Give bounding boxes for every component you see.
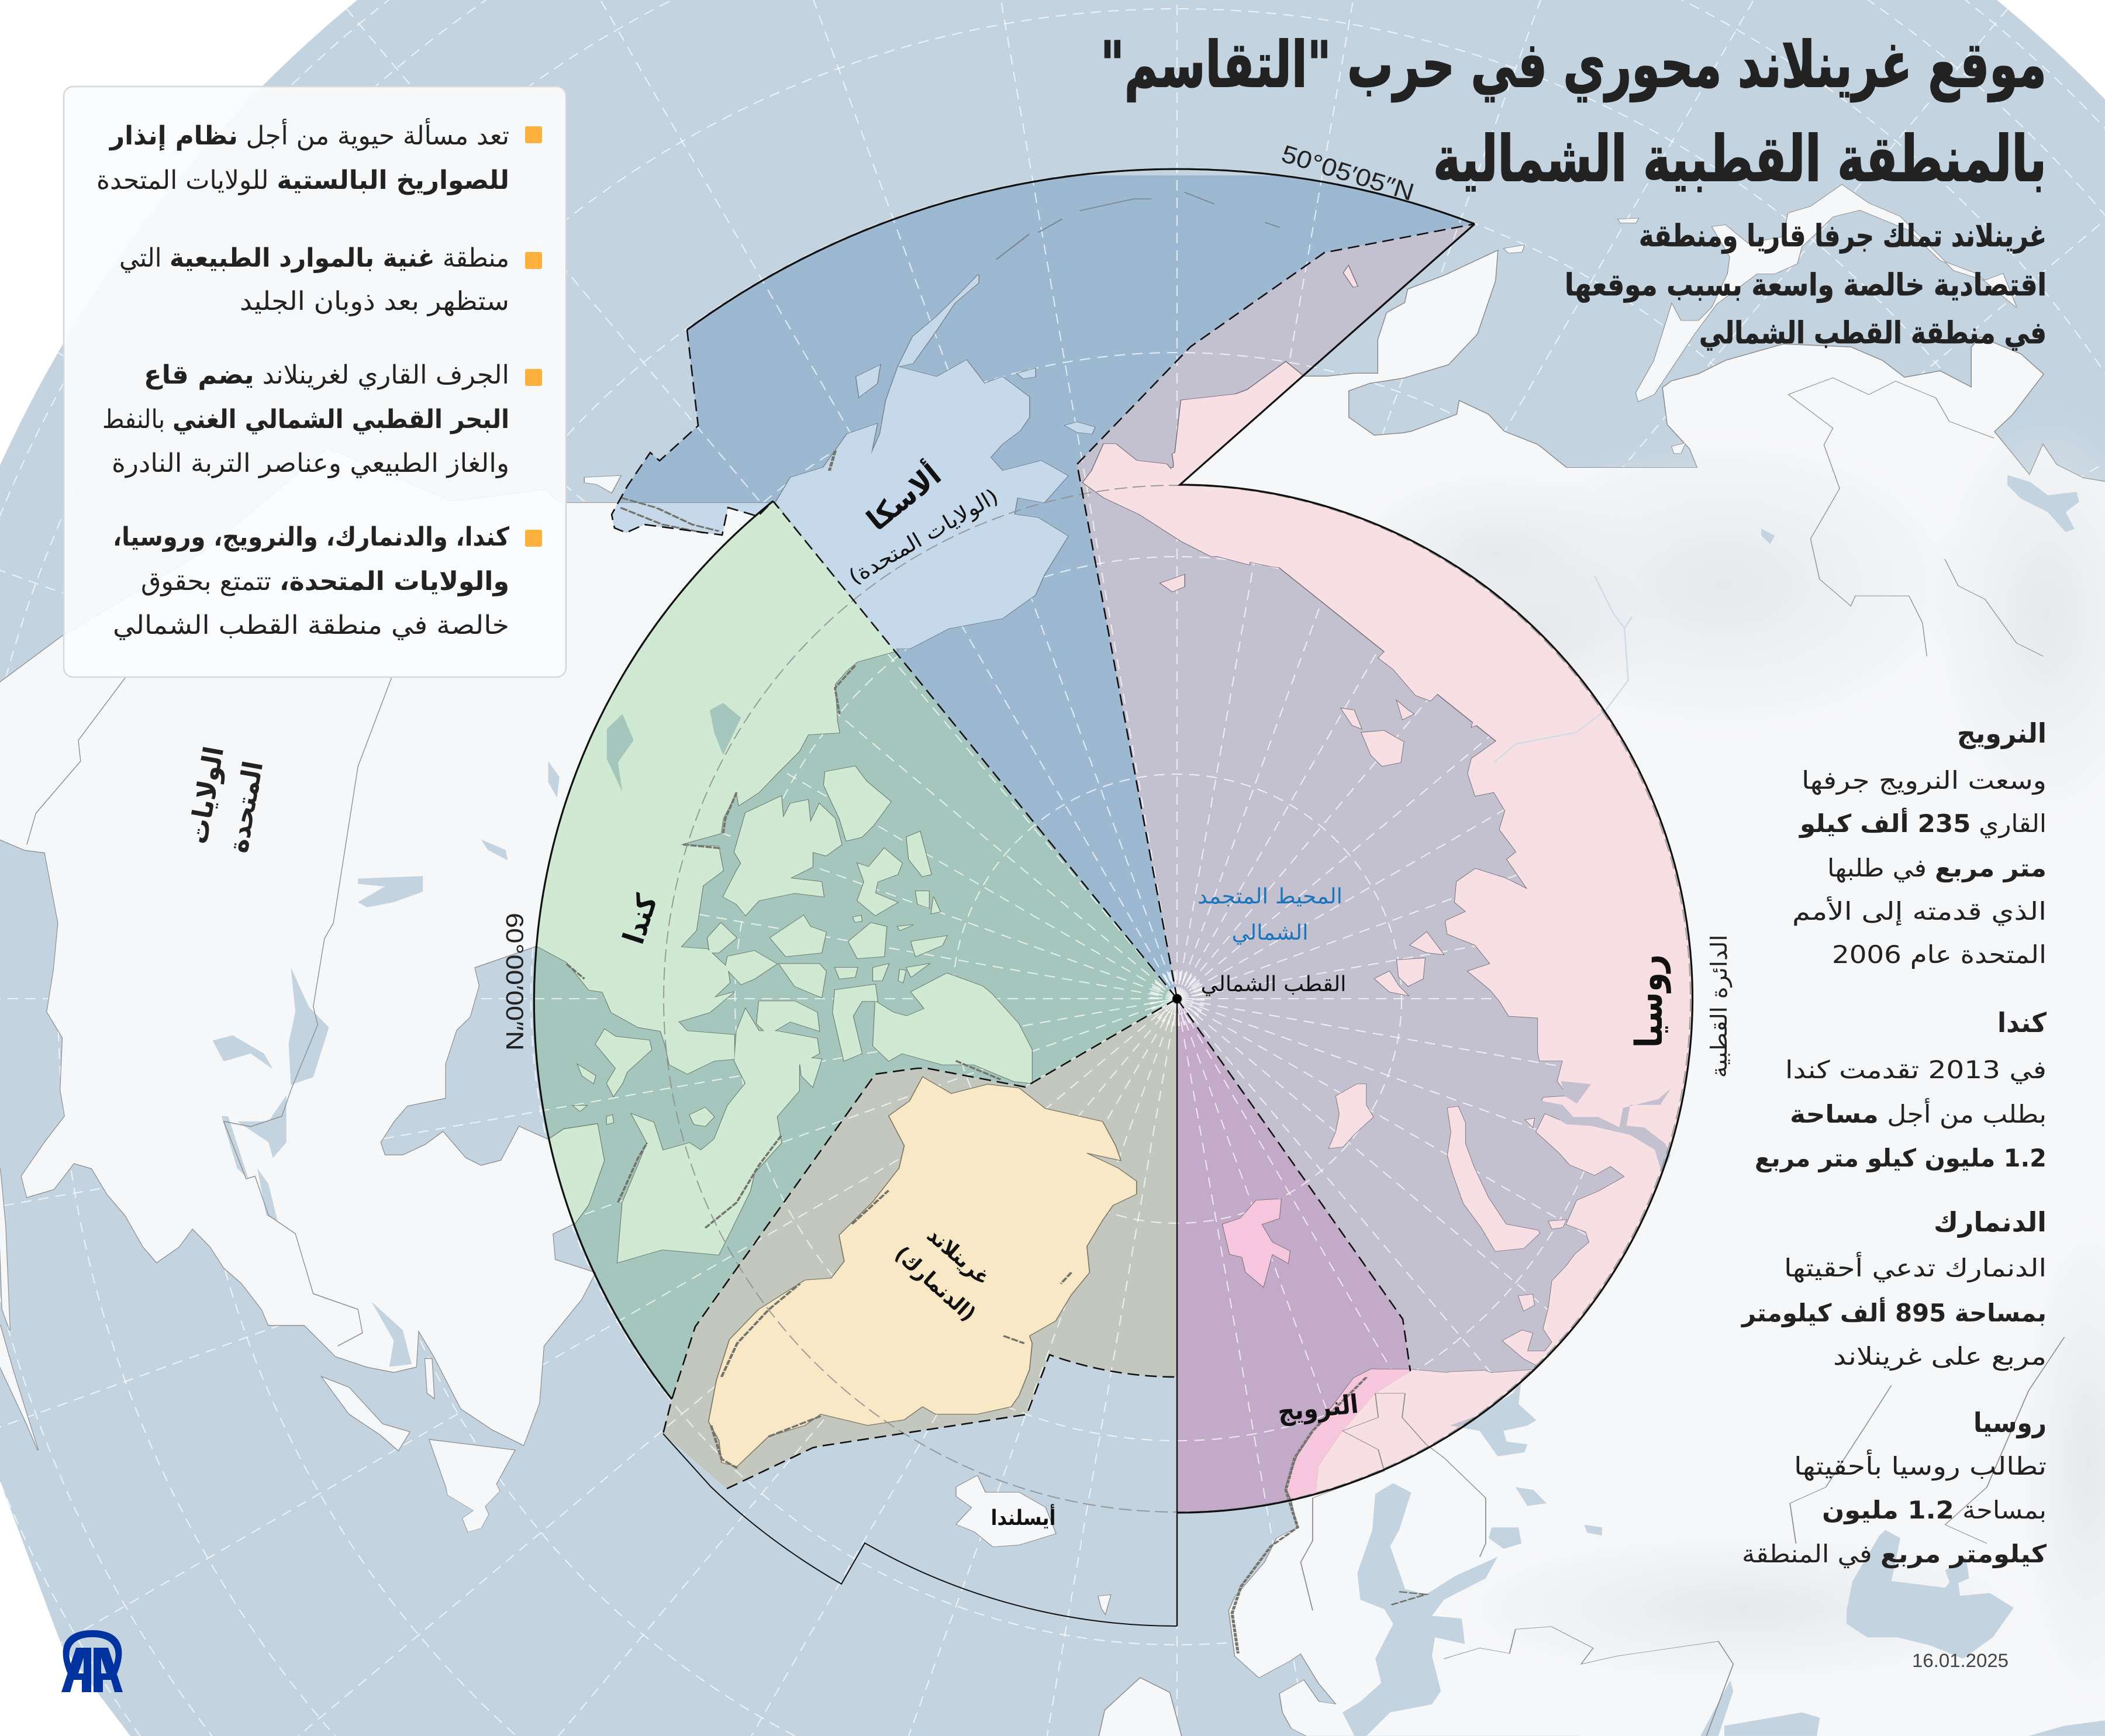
label: north pole: القطب الشمالي: [1201, 972, 1346, 996]
point 3: الجرف القاري لغرينلاند يضم قاع: [144, 360, 509, 390]
text: russia claim: بمساحة 1.2 مليون: [1822, 1496, 2047, 1525]
text: canada claim: في 2013 تقدمت كندا: [1785, 1055, 2047, 1085]
text: russia claim: [1742, 1407, 2047, 1569]
white strip beyond globe edge: [0, 1481, 130, 1736]
label: russia: روسيا: [1628, 954, 1671, 1048]
terrain shading: [1345, 403, 2105, 1707]
label: alaska united states: (الولايات المتحدة): [845, 485, 1003, 589]
date: 16.01.2025: [1912, 1650, 2009, 1671]
greenland: [709, 1076, 1137, 1466]
text: denmark claim: بمساحة 895 ألف كيلومتر: [1741, 1297, 2047, 1328]
point 2: ستظهر بعد ذوبان الجليد: [240, 287, 509, 316]
point 2: [119, 243, 542, 316]
zone boundary lines: [534, 169, 1693, 1626]
label: arctic ocean: [1198, 885, 1343, 945]
text: denmark claim: الدنمارك: [1934, 1206, 2047, 1238]
text: norway claim: المتحدة عام 2006: [1832, 940, 2047, 969]
dark fjord coastlines: [567, 451, 1426, 1654]
label: arctic ocean: الشمالي: [1231, 921, 1309, 945]
label: greenland: غرينلاند: [922, 1223, 995, 1290]
label: 60 degrees latitude: 60°00′00″N: [501, 913, 529, 1051]
label: canada: كندا: [616, 890, 664, 948]
text: denmark claim: الدنمارك تدعي أحقيتها: [1784, 1252, 2047, 1283]
label: united states: [182, 744, 269, 855]
arctic circle dashed line: [664, 485, 1690, 1512]
label: 50 degrees latitude: 50°05′05″N: [1278, 140, 1417, 206]
point 1: تعد مسألة حيوية من أجل نظام إنذار: [109, 118, 509, 151]
label: norway: النرويج: [1276, 1389, 1359, 1427]
north pole marker: [1172, 994, 1182, 1003]
text: norway claim: وسعت النرويج جرفها: [1802, 766, 2047, 795]
label: united states: المتحدة: [222, 759, 269, 855]
text: norway claim: [1792, 717, 2047, 969]
text: russia claim: روسيا: [1973, 1407, 2047, 1438]
text: russia claim: كيلومتر مربع في المنطقة: [1742, 1540, 2047, 1569]
point 3: والغاز الطبيعي وعناصر التربة النادرة: [112, 448, 509, 478]
text: norway claim: الذي قدمته إلى الأمم: [1792, 896, 2047, 926]
point 4: [113, 522, 542, 640]
point 4: كندا، والدنمارك، والنرويج، وروسيا،: [113, 522, 509, 552]
panel: key points: [64, 87, 566, 677]
text: denmark claim: [1741, 1206, 2047, 1371]
subtitle: [1565, 219, 2047, 351]
aleutian island chain: [996, 192, 1280, 260]
subtitle: في منطقة القطب الشمالي: [1699, 316, 2047, 351]
text: russia claim: تطالب روسيا بأحقيتها: [1794, 1449, 2047, 1481]
point 1: للصواريخ البالستية للولايات المتحدة: [96, 165, 509, 195]
text: canada claim: بطلب من أجل مساحة: [1790, 1098, 2047, 1128]
text: norway claim: النرويج: [1957, 717, 2047, 749]
subtitle: اقتصادية خالصة واسعة بسبب موقعها: [1565, 268, 2047, 303]
point 2: منطقة غنية بالموارد الطبيعية التي: [119, 243, 509, 273]
label: arctic circle: الدائرة القطبية: [1706, 934, 1733, 1078]
point 3: [102, 360, 542, 478]
borders and rivers: [27, 378, 2065, 1736]
point 4: خالصة في منطقة القطب الشمالي: [113, 610, 509, 640]
text: norway claim: القاري 235 ألف كيلو: [1799, 807, 2047, 838]
label: alaska: ألاسكا: [859, 456, 948, 537]
label: denmark: (الدنمارك): [890, 1242, 980, 1326]
logo: anadolu agency: [61, 1630, 123, 1692]
point 3: البحر القطبي الشمالي الغني بالنفط: [102, 405, 509, 434]
label: iceland: أيسلندا: [991, 1504, 1056, 1530]
label: united states: الولايات: [182, 744, 230, 846]
label: arctic ocean: المحيط المتجمد: [1198, 885, 1343, 909]
text: canada claim: كندا: [1997, 1007, 2047, 1038]
lakes and inland seas: [213, 475, 2105, 1736]
text: denmark claim: مربع على غرينلاند: [1833, 1342, 2047, 1371]
point 4: والولايات المتحدة، تتمتع بحقوق: [141, 567, 509, 596]
text: norway claim: متر مربع في طلبها: [1827, 854, 2047, 883]
text: canada claim: [1755, 1007, 2047, 1173]
title: [1100, 29, 2047, 196]
text: canada claim: 1.2 مليون كيلو متر مربع: [1755, 1144, 2047, 1173]
point 1: [96, 118, 542, 195]
